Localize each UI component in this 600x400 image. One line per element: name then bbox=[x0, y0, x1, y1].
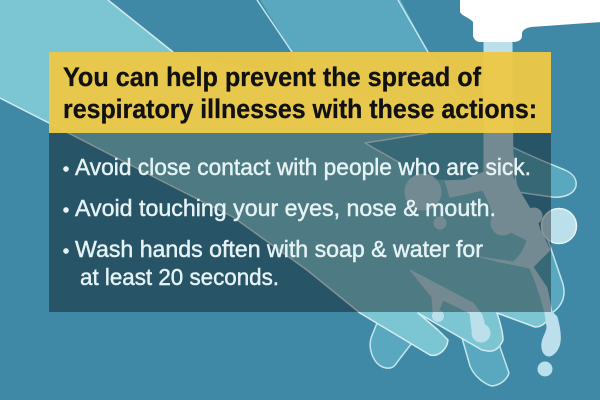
panel: bulleted actions bbox=[49, 133, 551, 312]
panel background bbox=[49, 133, 551, 312]
bullet 2: Avoid touching your eyes, nose & mouth. bbox=[75, 195, 496, 221]
action list bbox=[63, 154, 531, 290]
bullet 3: at least 20 seconds. bbox=[80, 264, 279, 290]
bullet 3 bbox=[63, 236, 483, 290]
bullet 3: Wash hands often with soap & water for bbox=[75, 236, 483, 262]
heading text: respiratory illnesses with these actions: bbox=[63, 94, 537, 124]
soap bubbles bbox=[405, 174, 576, 376]
heading text bbox=[63, 62, 537, 124]
bullet 1: Avoid close contact with people who are sick. bbox=[75, 154, 531, 180]
faucet bbox=[460, 0, 600, 42]
heading text: You can help prevent the spread of bbox=[63, 62, 482, 92]
panel: heading bbox=[49, 52, 551, 133]
lower hand: forearm and fingers bbox=[257, 0, 576, 386]
heading background bbox=[49, 52, 551, 133]
water stream and soap foam bbox=[405, 42, 576, 376]
